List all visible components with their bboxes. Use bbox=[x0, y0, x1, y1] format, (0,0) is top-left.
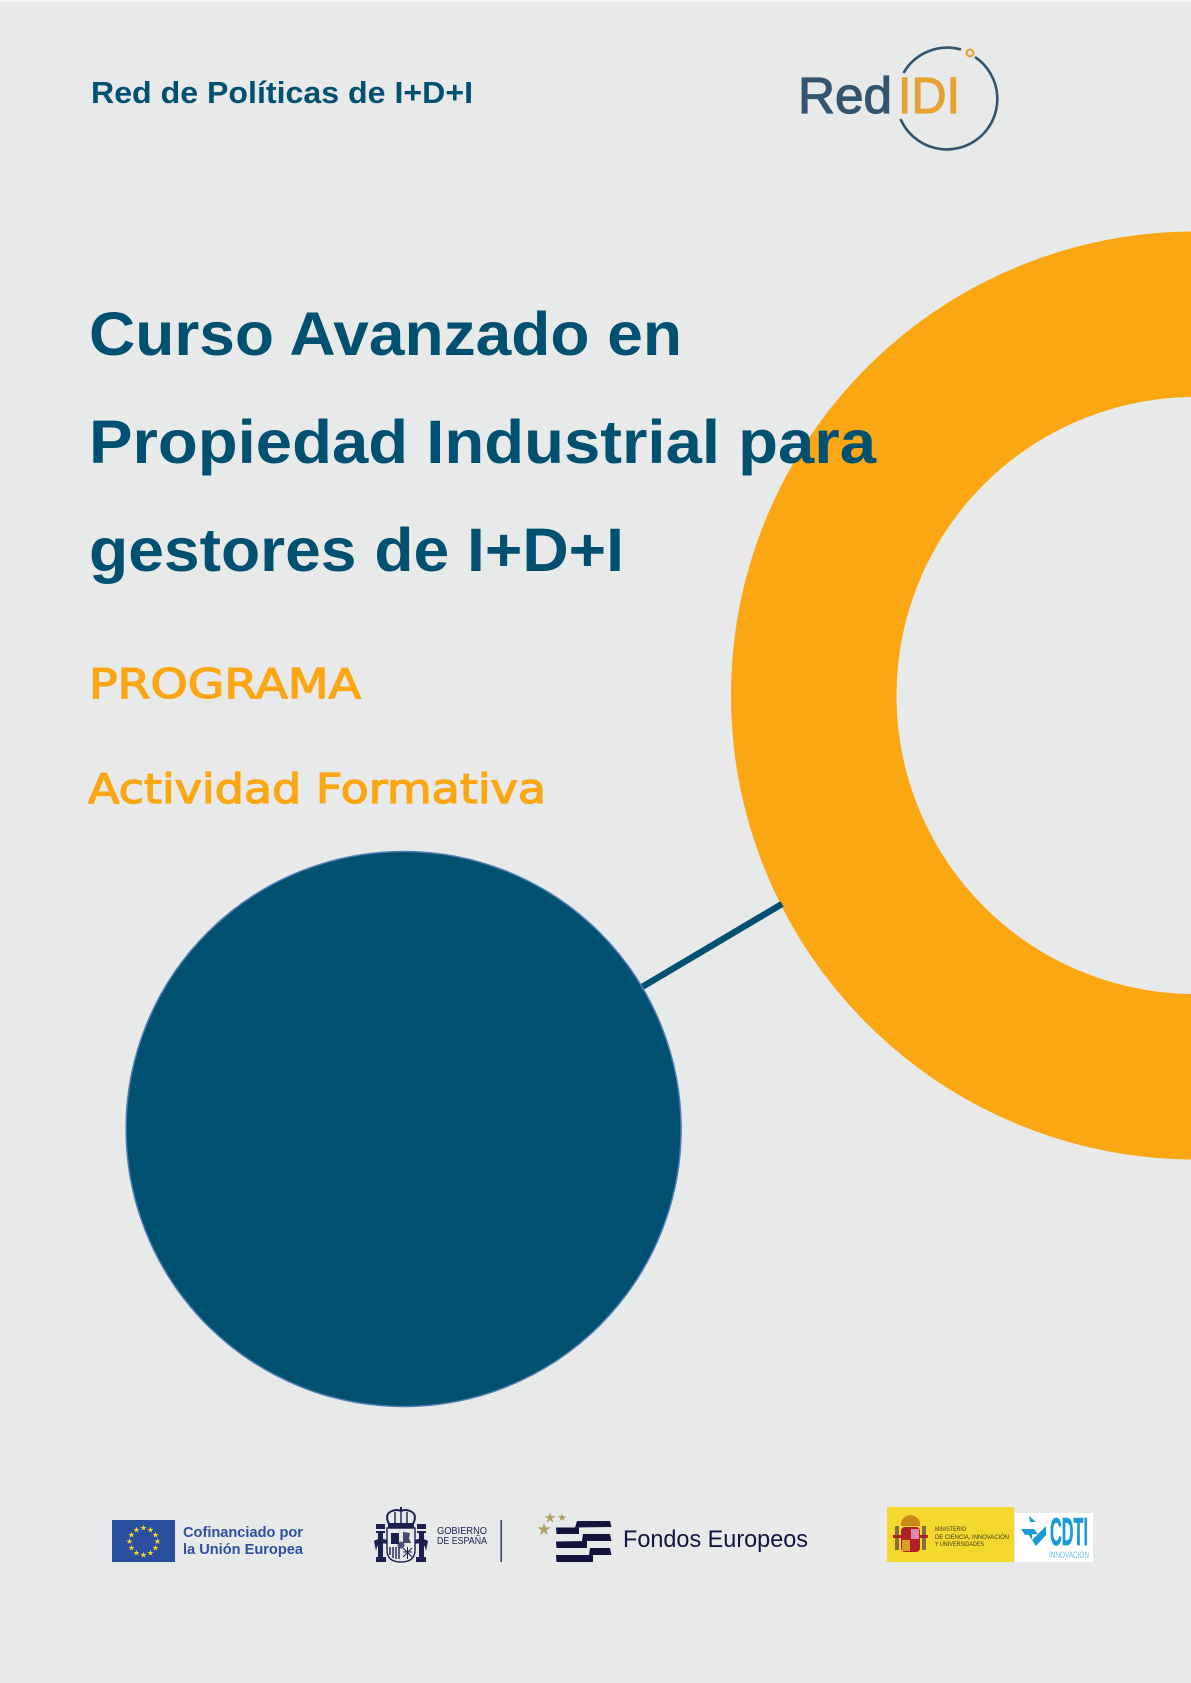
text: cofinanciado bbox=[183, 1524, 304, 1558]
logo: EU flag: ★ bbox=[126, 1537, 133, 1546]
RedIDI logo bbox=[798, 48, 997, 149]
logo: EU flag: ★ bbox=[128, 1544, 135, 1552]
logo: EU flag: ★ bbox=[133, 1548, 140, 1558]
RedIDI logo: Red bbox=[798, 67, 892, 124]
logo: Ministerio panel: Y UNIVERSIDADES bbox=[935, 1542, 984, 1548]
logo: Fondos Europeos mark: ★ bbox=[544, 1510, 556, 1526]
logo: Fondos Europeos mark bbox=[536, 1510, 612, 1562]
text: gobierno de España bbox=[437, 1526, 487, 1547]
network label: Red de Políticas de I+D+I bbox=[91, 75, 473, 110]
blue circle bbox=[126, 852, 681, 1406]
logo: CDTI panel: INNOVACIÓN bbox=[1049, 1550, 1089, 1561]
text: cofinanciado: la Unión Europea bbox=[183, 1541, 304, 1558]
logo: EU flag: ★ bbox=[140, 1550, 147, 1560]
title: gestores de I+D+I bbox=[89, 516, 624, 584]
subtitle: actividad formativa: Actividad Formativa bbox=[88, 765, 546, 813]
text: Fondos Europeos: Fondos Europeos bbox=[623, 1526, 808, 1553]
logo: Ministerio panel: DE CIENCIA, INNOVACIÓN bbox=[935, 1534, 1009, 1541]
logo: EU flag: ★ bbox=[152, 1544, 159, 1552]
text: gobierno de España: GOBIERNO bbox=[437, 1526, 487, 1537]
text: CDTI bbox=[1050, 1511, 1088, 1554]
title: Propiedad Industrial para bbox=[89, 408, 877, 476]
logo: EU flag: ★ bbox=[140, 1524, 147, 1532]
logo: EU flag: ★ bbox=[154, 1537, 161, 1546]
logo: EU flag: ★ bbox=[152, 1530, 159, 1540]
text: cofinanciado: Cofinanciado por bbox=[183, 1524, 303, 1541]
logo: EU flag: ★ bbox=[147, 1548, 154, 1558]
logo: Ministerio panel: MINISTERIO bbox=[935, 1527, 966, 1533]
subtitle: programa: PROGRAMA bbox=[89, 660, 361, 708]
logo: Gobierno de España coat of arms bbox=[374, 1507, 428, 1562]
connector line between circle and ring bbox=[642, 904, 782, 987]
title bbox=[89, 300, 877, 584]
logo: EU flag: ★ bbox=[147, 1526, 154, 1534]
logo: CDTI panel bbox=[1015, 1511, 1093, 1562]
logo: Fondos Europeos mark: ★ bbox=[536, 1520, 552, 1539]
title: Curso Avanzado en bbox=[89, 300, 682, 368]
logo: EU flag bbox=[112, 1520, 175, 1562]
logo: EU flag: ★ bbox=[128, 1530, 135, 1540]
orange ring bbox=[814, 314, 1191, 1077]
RedIDI logo: IDI bbox=[898, 67, 960, 124]
logo: Fondos Europeos mark: ★ bbox=[557, 1512, 567, 1524]
divider between logos bbox=[500, 1520, 502, 1562]
text: gobierno de España: DE ESPAÑA bbox=[437, 1534, 487, 1547]
logo: Ministerio panel bbox=[887, 1507, 1014, 1562]
logo: EU flag: ★ bbox=[133, 1526, 140, 1534]
